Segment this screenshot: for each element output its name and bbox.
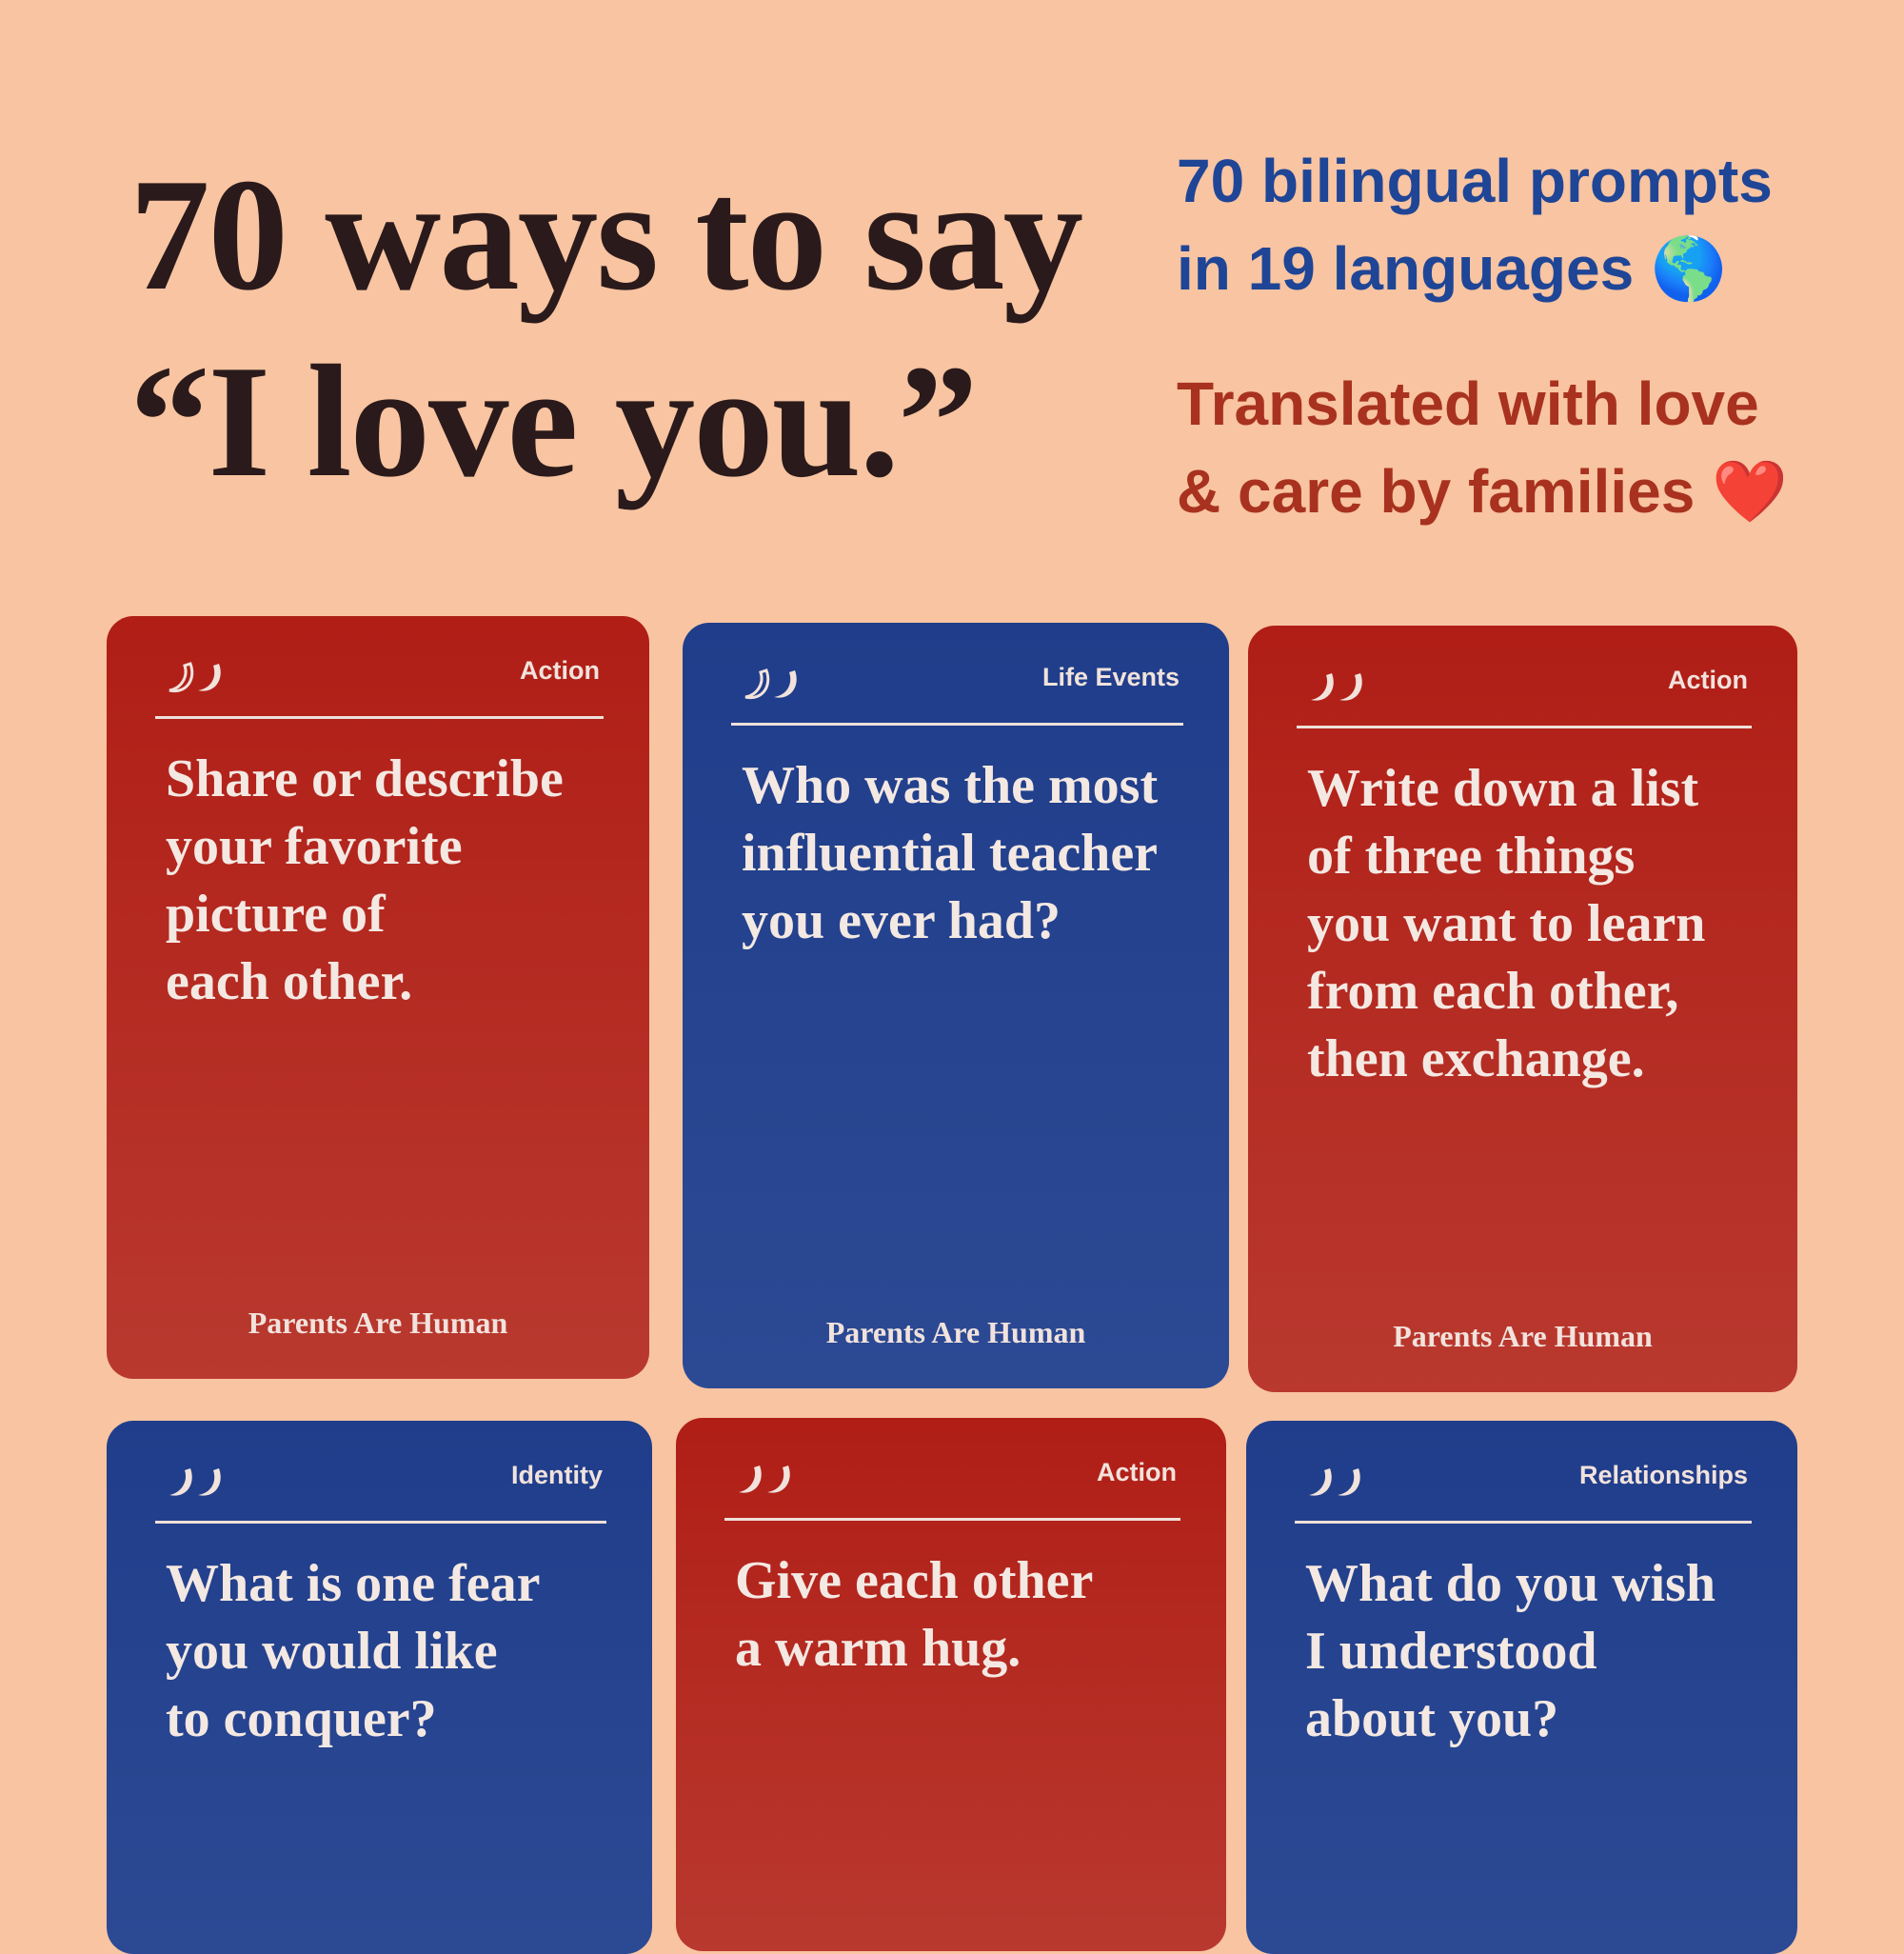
prompt (735, 1551, 1093, 1678)
footer: Parents Are Human (1393, 1319, 1653, 1353)
category: Relationships (1579, 1461, 1748, 1489)
prompt: Give each other (735, 1551, 1093, 1610)
prompt (166, 1554, 541, 1748)
prompt: your favorite (166, 817, 463, 876)
icon: peppers (169, 1468, 221, 1496)
title line 2: “I love you.” (129, 331, 976, 510)
title line 1: 70 ways to say (129, 145, 1081, 324)
prompt (1305, 1554, 1716, 1748)
subtitle blue: in 19 languages 🌎 (1177, 234, 1727, 303)
prompt: to conquer? (166, 1689, 437, 1748)
prompt: you ever had? (742, 891, 1061, 950)
prompt: Share or describe (166, 749, 564, 808)
prompt: of three things (1307, 827, 1635, 886)
prompt: Who was the most (742, 756, 1158, 815)
card 4 (107, 1421, 652, 1954)
card 5 (676, 1418, 1226, 1951)
prompt: you would like (166, 1622, 498, 1681)
icon: peppers (1311, 673, 1362, 701)
prompt: What is one fear (166, 1554, 541, 1613)
card 6 (1246, 1421, 1797, 1954)
prompt: you want to learn (1307, 894, 1705, 953)
subtitle blue: 70 bilingual prompts (1177, 147, 1773, 215)
prompt: picture of (166, 885, 386, 944)
icon: peppers (169, 662, 221, 693)
card 1 (107, 616, 649, 1379)
subtitle red (1177, 369, 1788, 526)
card 3 (1248, 626, 1797, 1392)
icon: peppers (739, 1466, 790, 1493)
category: Identity (511, 1461, 603, 1489)
footer: Parents Are Human (826, 1315, 1085, 1349)
prompt (166, 749, 564, 1011)
subtitle blue (1177, 147, 1773, 303)
category: Life Events (1042, 663, 1180, 691)
prompt: each other. (166, 952, 412, 1011)
prompt: from each other, (1307, 962, 1678, 1021)
prompt (742, 756, 1158, 950)
icon: peppers (1309, 1468, 1360, 1496)
prompt: What do you wish (1305, 1554, 1716, 1613)
category: Action (1097, 1458, 1177, 1486)
prompt (1307, 759, 1705, 1088)
subtitle red: Translated with love (1177, 369, 1759, 438)
subtitle red: & care by families ❤️ (1177, 457, 1788, 526)
prompt: Write down a list (1307, 759, 1698, 818)
prompt: I understood (1305, 1622, 1597, 1681)
category: Action (1668, 666, 1748, 694)
category: Action (520, 656, 600, 685)
prompt: influential teacher (742, 824, 1158, 883)
prompt: then exchange. (1307, 1029, 1645, 1088)
card 2 (683, 623, 1229, 1388)
icon: peppers (744, 668, 797, 699)
footer: Parents Are Human (248, 1306, 507, 1340)
prompt: a warm hug. (735, 1619, 1021, 1678)
prompt: about you? (1305, 1689, 1558, 1748)
